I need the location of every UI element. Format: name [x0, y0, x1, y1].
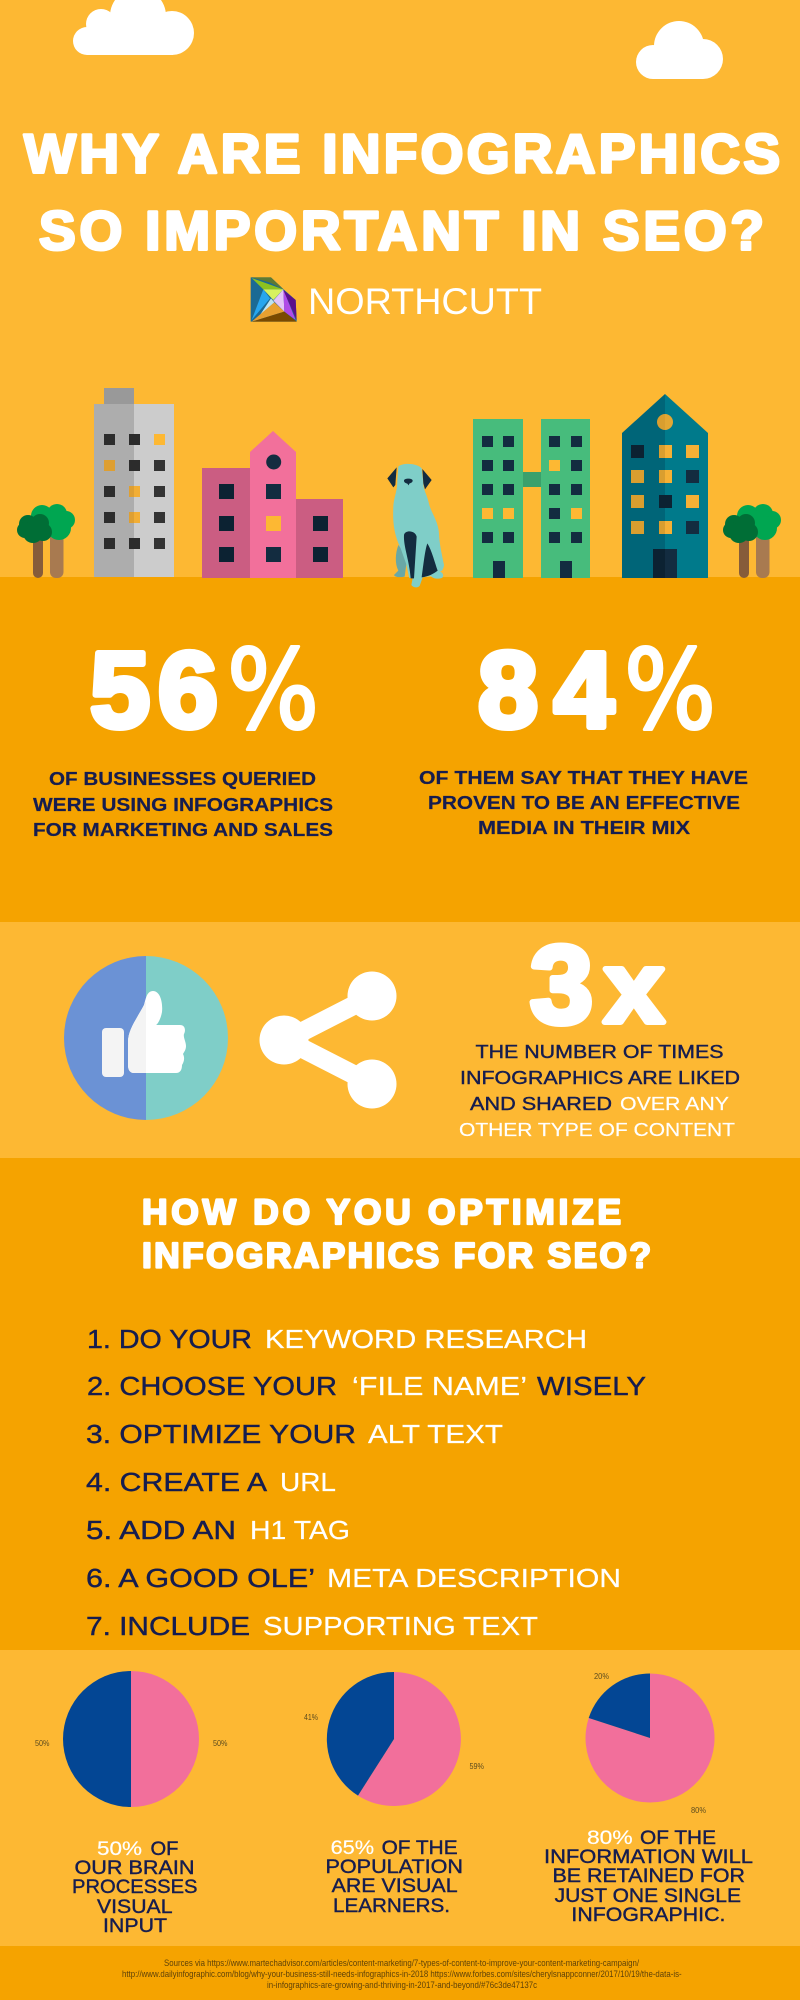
heading: how do you optimize: HOW DO YOU OPTIMIZE	[142, 1192, 621, 1232]
panel: sources footer: in-infographics-are-growing-and-thriving-in-2017-and-beyond/#76c3de47137c	[267, 1980, 537, 1991]
step 3: ALT TEXT	[368, 1421, 503, 1449]
step 2: 2. CHOOSE YOUR	[87, 1373, 337, 1401]
panel: sources footer: Sources via https://www.martechadvisor.com/articles/content-marketing/7-types-of-content-to-improve-your-content-marketing-campaign/	[164, 1958, 639, 1969]
panel: pie charts	[0, 1650, 800, 1946]
step 6: META DESCRIPTION	[327, 1565, 621, 1593]
step 4: URL	[280, 1469, 336, 1497]
text: 80 percent caption: BE RETAINED FOR	[552, 1866, 745, 1887]
step 6: 6. A GOOD OLE’	[86, 1565, 315, 1593]
icon: logo mark	[251, 277, 297, 322]
stat: 56 percent: 56	[90, 629, 218, 750]
text: likes and shares description: OVER ANY	[620, 1093, 729, 1114]
illustration: green twin towers	[473, 419, 590, 578]
text: 65 percent caption: 65%	[331, 1838, 374, 1859]
step 1: KEYWORD RESEARCH	[265, 1326, 587, 1354]
illustration: pink building	[202, 431, 343, 578]
logo: Northcutt	[251, 277, 542, 322]
text: proven effective	[419, 767, 748, 838]
list: seven steps	[86, 1326, 646, 1641]
step 3	[86, 1421, 503, 1449]
step 4	[86, 1469, 336, 1497]
text: 65 percent caption: ARE VISUAL	[332, 1876, 458, 1897]
panel: sources footer	[0, 1946, 800, 2000]
text: 65 percent caption: LEARNERS.	[333, 1896, 450, 1917]
icon: cloud left	[73, 0, 194, 55]
step 1: 1. DO YOUR	[87, 1326, 252, 1354]
text: businesses using infographics	[33, 768, 333, 840]
step 4: 4. CREATE A	[86, 1469, 267, 1497]
stat: 3x	[530, 924, 664, 1047]
stat: 84 percent: %	[624, 626, 716, 754]
step 7: 7. INCLUDE	[86, 1613, 250, 1641]
pie chart: information retained: 80%	[691, 1806, 706, 1815]
text: 80 percent caption: JUST ONE SINGLE	[555, 1886, 741, 1907]
text: likes and shares description: INFOGRAPHICS ARE LIKED	[460, 1067, 740, 1088]
text: businesses using infographics: OF BUSINESSES QUERIED	[49, 768, 316, 789]
text: likes and shares description: AND SHARED	[470, 1093, 612, 1114]
panel: statistics	[0, 577, 800, 922]
text: 65 percent caption: POPULATION	[326, 1857, 463, 1878]
heading: how do you optimize	[142, 1192, 651, 1276]
pie chart: brain processes visual input: 50%	[35, 1739, 50, 1748]
step 5	[86, 1517, 350, 1545]
stat: 56 percent: %	[227, 626, 319, 754]
illustration: teal building	[622, 394, 708, 578]
step 6	[86, 1565, 621, 1593]
stat: 56 percent	[90, 626, 319, 754]
text: businesses using infographics: FOR MARKETING AND SALES	[33, 819, 333, 840]
title: WHY ARE INFOGRAPHICS	[24, 122, 780, 184]
text: 80 percent caption	[544, 1828, 753, 1926]
panel: likes and shares	[0, 922, 800, 1158]
pie chart: visual learners	[304, 1672, 484, 1806]
pie chart: information retained	[586, 1672, 715, 1815]
pie chart: visual learners: 41%	[304, 1713, 318, 1722]
step 3: 3. OPTIMIZE YOUR	[86, 1421, 356, 1449]
stat: 84 percent	[478, 626, 716, 754]
step 5: 5. ADD AN	[86, 1517, 236, 1545]
text: 50 percent caption: INPUT	[103, 1916, 167, 1937]
panel: optimize for SEO	[0, 1158, 800, 1650]
text: businesses using infographics: WERE USING INFOGRAPHICS	[33, 794, 333, 815]
text: 50 percent caption: 50%	[97, 1839, 142, 1860]
step 2: ‘FILE NAME’	[352, 1373, 527, 1401]
logo wordmark: NORTHCUTT	[308, 281, 542, 322]
text: 80 percent caption: OF THE	[640, 1828, 716, 1849]
title	[24, 122, 780, 262]
illustration: gray building	[94, 388, 174, 577]
step 2: WISELY	[537, 1373, 646, 1401]
step 7	[86, 1613, 538, 1641]
text: 50 percent caption: OUR BRAIN	[74, 1858, 194, 1879]
text: 50 percent caption: PROCESSES	[72, 1877, 198, 1898]
panel: sources footer: http://www.dailyinfographic.com/blog/why-your-business-still-needs-infographics-in-2018 https://www.forbes.com/sites/cherylsnappconner/2017/10/19/the-data-is-	[122, 1969, 682, 1980]
illustration: right trees	[723, 504, 781, 578]
title: SO IMPORTANT IN SEO?	[39, 200, 764, 262]
pie chart: brain processes visual input: 50%	[213, 1739, 228, 1748]
text: proven effective: MEDIA IN THEIR MIX	[478, 817, 691, 838]
text: likes and shares description: THE NUMBER OF TIMES	[476, 1041, 724, 1062]
illustration: left trees	[17, 504, 75, 578]
text: likes and shares description	[459, 1041, 740, 1140]
step 7: SUPPORTING TEXT	[263, 1613, 538, 1641]
text: proven effective: PROVEN TO BE AN EFFECTIVE	[428, 792, 740, 813]
heading: how do you optimize: INFOGRAPHICS FOR SEO?	[142, 1236, 651, 1276]
icon: share	[260, 972, 396, 1108]
stat: 3x: 3	[530, 924, 593, 1047]
text: likes and shares description: OTHER TYPE OF CONTENT	[459, 1119, 735, 1140]
icon: thumbs up circle	[64, 956, 228, 1120]
stat: 84 percent: 84	[478, 629, 614, 750]
text: 65 percent caption: OF THE	[382, 1838, 458, 1859]
text: proven effective: OF THEM SAY THAT THEY HAVE	[419, 767, 748, 788]
illustration: dog	[387, 464, 444, 587]
text: 50 percent caption: OF	[150, 1839, 178, 1860]
text: 80 percent caption: INFOGRAPHIC.	[571, 1905, 725, 1926]
text: 50 percent caption: VISUAL	[97, 1897, 172, 1918]
step 1	[87, 1326, 587, 1354]
pie chart: visual learners: 59%	[470, 1762, 484, 1771]
panel: header and city scene	[0, 0, 800, 587]
pie chart: information retained: 20%	[594, 1672, 609, 1681]
stat: 3x: x	[604, 932, 664, 1044]
step 2	[87, 1373, 646, 1401]
pie chart: brain processes visual input	[35, 1671, 228, 1807]
step 5: H1 TAG	[250, 1517, 350, 1545]
text: 80 percent caption: 80%	[587, 1828, 633, 1849]
icon: cloud right	[636, 21, 723, 79]
text: 65 percent caption	[326, 1838, 463, 1917]
text: 80 percent caption: INFORMATION WILL	[544, 1847, 753, 1868]
text: 50 percent caption	[72, 1839, 198, 1937]
